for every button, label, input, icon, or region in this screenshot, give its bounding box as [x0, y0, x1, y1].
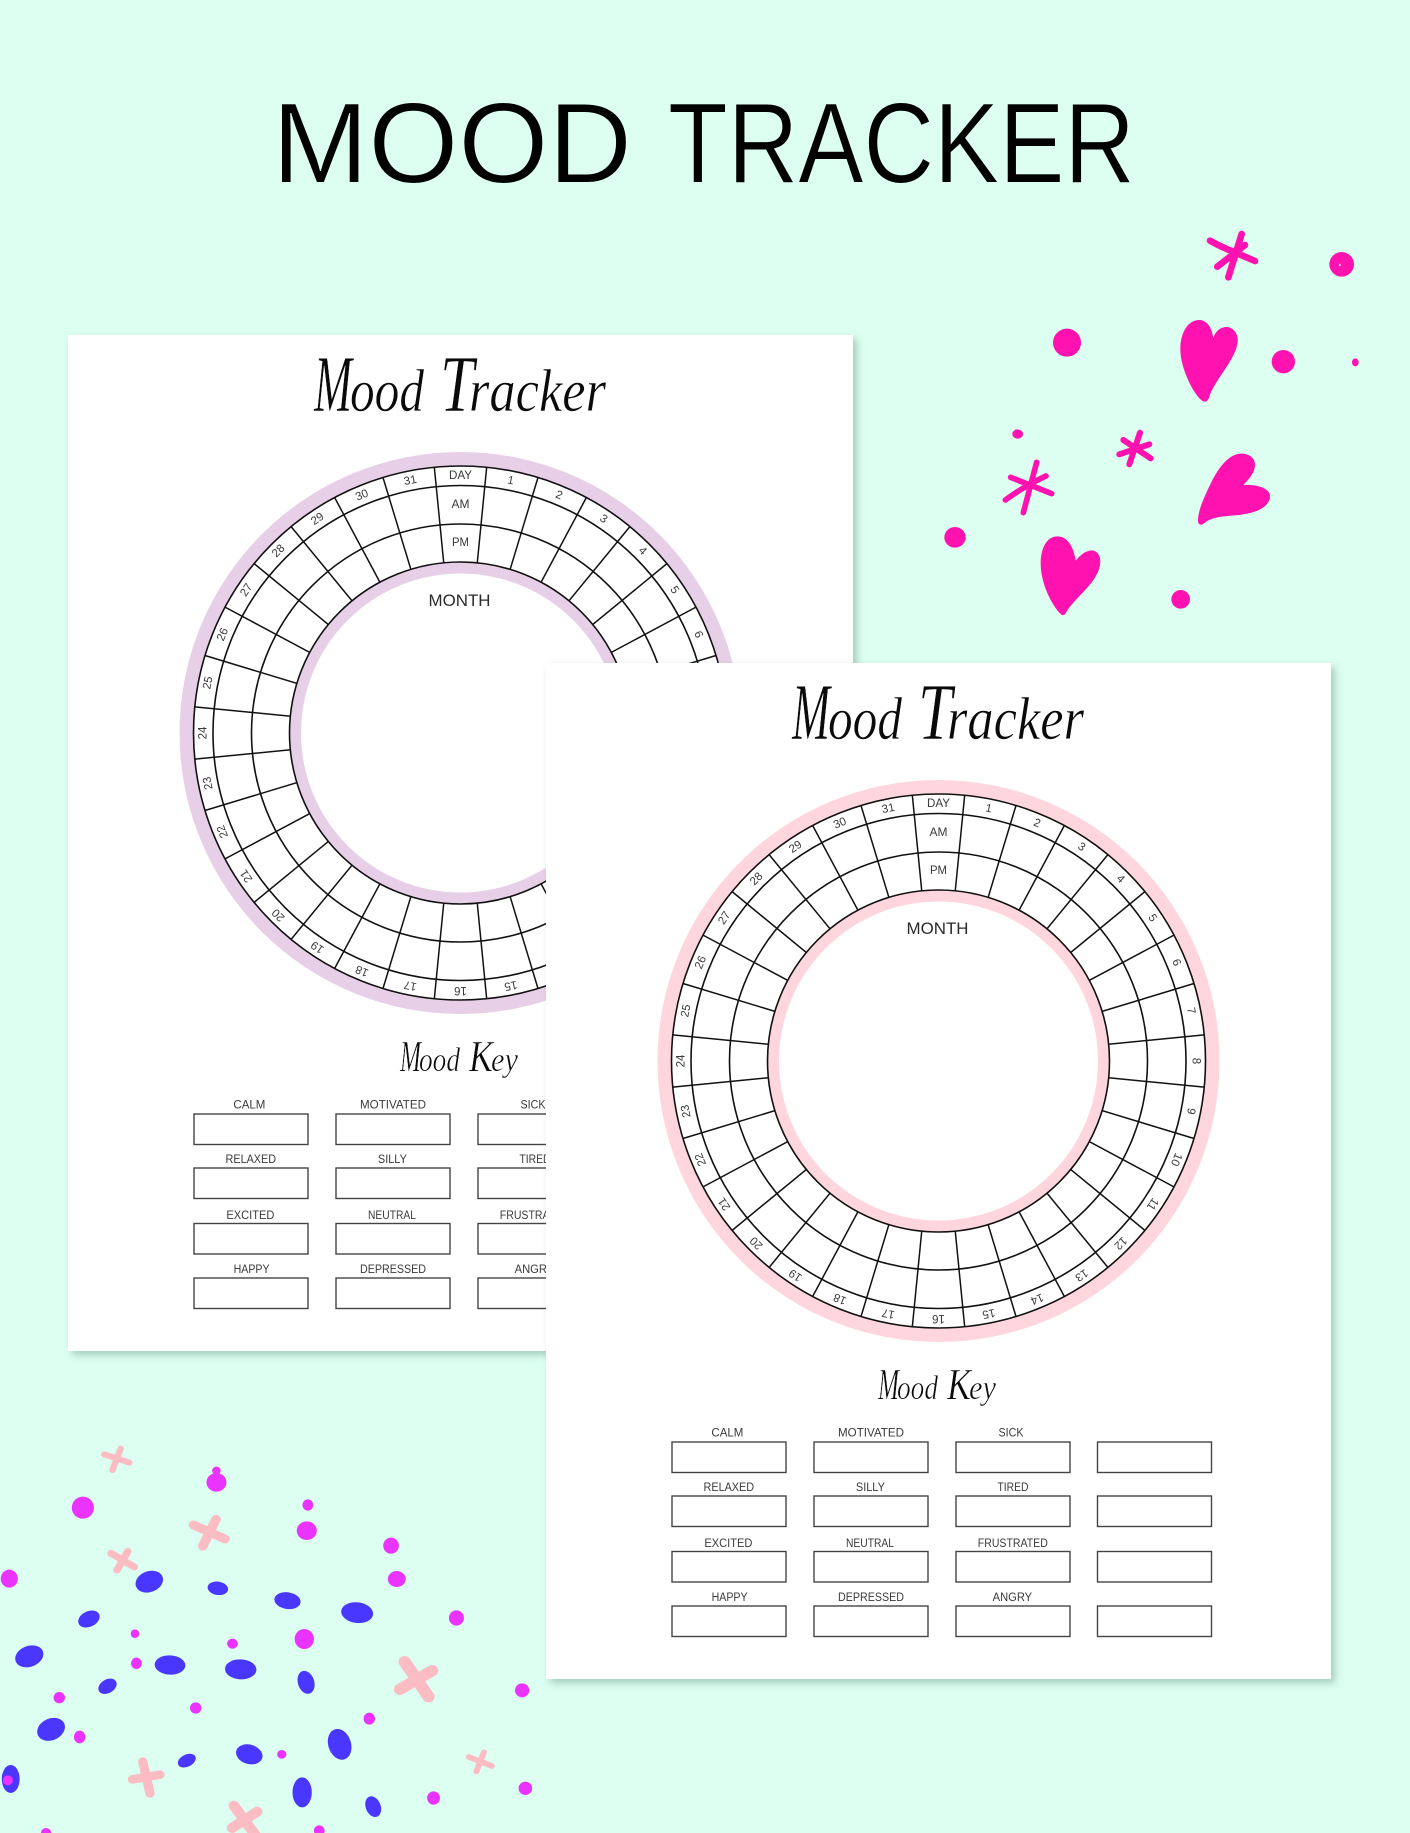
mood key grid: CALM [711, 1428, 743, 1440]
day labels: 26 [215, 626, 231, 643]
day labels: 30 [354, 488, 370, 504]
MONTH label: MONTH [906, 920, 968, 938]
day labels: 14 [550, 962, 567, 979]
day labels: 11 [1144, 1195, 1160, 1212]
blue ovals [2, 1567, 384, 1819]
mood key heading: K [946, 1360, 973, 1409]
day labels: 11 [666, 867, 682, 884]
mood key heading: ey [491, 1042, 519, 1079]
AM label: AM [452, 499, 470, 511]
mood key grid: HAPPY [712, 1592, 748, 1604]
mood key heading: ood [897, 1370, 939, 1407]
day labels: 5 [1145, 912, 1159, 924]
day labels: 24 [198, 726, 210, 739]
day labels: 14 [1028, 1290, 1045, 1307]
day labels: 3 [597, 513, 609, 526]
decoration: pink hearts and stars [944, 234, 1359, 615]
mood key grid: EXCITED [226, 1210, 274, 1222]
decoration: confetti dots and crosses [1, 1449, 532, 1833]
day labels: 15 [981, 1306, 996, 1320]
icon: asterisk left [1005, 462, 1052, 513]
day labels: 2 [554, 489, 564, 502]
page heading: T [918, 669, 956, 757]
day labels: 17 [403, 978, 418, 992]
page sheet [546, 663, 1331, 1679]
day labels: 13 [1073, 1266, 1090, 1283]
panel: purple mood tracker page [68, 335, 853, 1351]
day labels: 4 [636, 545, 649, 558]
mood key grid: FRUSTRATED [978, 1538, 1048, 1550]
AM label: AM [930, 827, 948, 839]
day labels: 26 [693, 954, 709, 971]
mood key grid: SICK [998, 1428, 1024, 1440]
day labels: 16 [454, 984, 467, 996]
mood key grid: FRUSTRATED [500, 1210, 570, 1222]
PM label: PM [452, 537, 469, 549]
day labels: 19 [787, 1266, 804, 1283]
day labels: 18 [354, 962, 370, 978]
mood key grid: MOTIVATED [838, 1428, 904, 1440]
day labels: 1 [984, 802, 993, 815]
day labels: 9 [706, 779, 719, 787]
mood key grid: TIRED [998, 1482, 1028, 1494]
mood key grid: MOTIVATED [360, 1100, 426, 1112]
day labels: DAY [927, 798, 950, 810]
page sheet [68, 335, 853, 1351]
mood key grid: ANGRY [993, 1592, 1032, 1604]
title: MOOD [272, 81, 632, 208]
day labels: 21 [238, 867, 255, 884]
mood key grid: HAPPY [234, 1264, 270, 1276]
mood key grid: DEPRESSED [838, 1592, 904, 1604]
day labels: 9 [1184, 1107, 1197, 1115]
PM label: PM [930, 865, 947, 877]
day labels: 17 [881, 1306, 896, 1320]
day labels: 4 [1114, 873, 1127, 886]
page heading: racker [947, 686, 1085, 752]
mood key grid: RELAXED [226, 1154, 276, 1166]
mood key grid: ANGRY [515, 1264, 554, 1276]
crosses [104, 1449, 492, 1833]
day labels: 8 [712, 730, 724, 736]
mood key grid [672, 1428, 1212, 1636]
magenta dots [1, 1467, 532, 1833]
mood key heading: K [468, 1032, 495, 1081]
icon: heart top [1180, 320, 1238, 402]
day labels: 22 [215, 823, 231, 840]
day labels: 29 [787, 839, 804, 856]
day labels: 1 [506, 474, 515, 487]
mood key heading: M [877, 1360, 900, 1409]
day labels: 27 [238, 582, 255, 599]
page heading: M [313, 341, 354, 429]
day labels: 6 [1169, 957, 1183, 968]
spokes [673, 795, 1204, 1327]
page heading: M [791, 669, 832, 757]
day labels: 18 [832, 1290, 848, 1306]
page heading: ood [350, 358, 425, 424]
icon: heart bottom [1041, 536, 1100, 615]
day labels: 16 [932, 1312, 945, 1324]
day labels: 10 [1168, 1151, 1184, 1168]
day labels [676, 798, 1202, 1324]
mood key grid [194, 1100, 734, 1308]
mood key heading: ey [969, 1370, 997, 1407]
mood key grid: CALM [233, 1100, 265, 1112]
day labels: 21 [716, 1195, 733, 1212]
day labels: 3 [1075, 841, 1087, 854]
mood key grid: SILLY [378, 1154, 407, 1166]
day labels: 28 [748, 871, 766, 888]
day labels: 10 [690, 823, 706, 840]
mood key grid: SICK [520, 1100, 546, 1112]
icon: heart right [1198, 454, 1270, 525]
day labels: 30 [832, 816, 848, 832]
day labels: 31 [881, 802, 896, 816]
mood key grid: DEPRESSED [360, 1264, 426, 1276]
day labels: 31 [403, 474, 418, 488]
dots [944, 252, 1359, 609]
panel: pink mood tracker page [546, 663, 1331, 1679]
chart: circular mood tracker [180, 452, 742, 1014]
day labels: 15 [503, 978, 518, 992]
day labels: 25 [201, 675, 216, 690]
day labels: 24 [676, 1054, 688, 1067]
page heading: ood [828, 686, 903, 752]
day labels: 25 [679, 1003, 694, 1018]
day labels: 7 [1184, 1007, 1197, 1015]
spokes [195, 467, 726, 999]
mood key grid: EXCITED [704, 1538, 752, 1550]
icon: asterisk top [1210, 234, 1255, 277]
day labels: 13 [595, 938, 612, 955]
day labels: 20 [270, 906, 288, 923]
MONTH label: MONTH [428, 592, 490, 610]
mood key grid: SILLY [856, 1482, 885, 1494]
day labels: 28 [270, 543, 288, 560]
page heading: racker [469, 358, 607, 424]
mood key heading: ood [419, 1042, 461, 1079]
day labels: 8 [1190, 1058, 1202, 1064]
icon: asterisk middle [1119, 433, 1151, 464]
day labels: 23 [679, 1104, 694, 1119]
chart: circular mood tracker [658, 780, 1220, 1342]
mood key heading: M [399, 1032, 422, 1081]
day labels: 7 [706, 679, 719, 687]
day labels: 19 [309, 938, 326, 955]
page heading: T [440, 341, 478, 429]
day labels: 22 [693, 1151, 709, 1168]
day labels: 12 [1111, 1234, 1129, 1251]
mood key grid: NEUTRAL [846, 1538, 895, 1550]
day labels: 5 [667, 584, 681, 596]
mood key grid: RELAXED [704, 1482, 754, 1494]
mood key grid: NEUTRAL [368, 1210, 417, 1222]
day labels [198, 470, 724, 996]
day labels: 29 [309, 511, 326, 528]
mood key grid: TIRED [520, 1154, 550, 1166]
day labels: 6 [691, 629, 705, 640]
title: TRACKER [668, 81, 1135, 208]
day labels: 27 [716, 910, 733, 927]
day labels: 12 [633, 906, 651, 923]
day labels: DAY [449, 470, 472, 482]
day labels: 20 [748, 1234, 766, 1251]
day labels: 23 [201, 776, 216, 791]
day labels: 2 [1032, 817, 1042, 830]
